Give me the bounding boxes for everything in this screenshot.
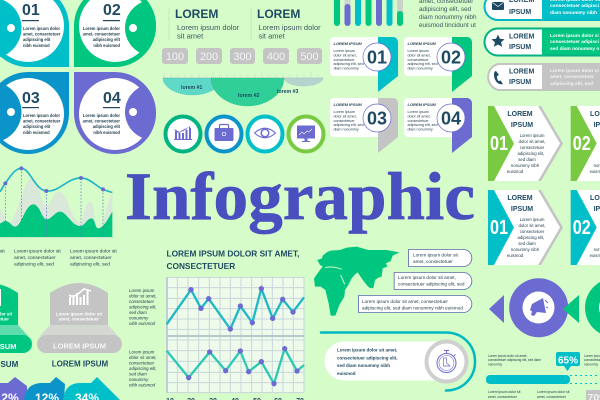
panel: chevron teal 01: consectetuer: [520, 229, 545, 234]
panel: ribbon card 03: diam nonummy: [334, 128, 359, 132]
chart heading: CONSECTETUER: [166, 261, 235, 271]
text block: two lorem columns: sit amet: [177, 32, 204, 40]
callout: map label three: [358, 295, 472, 312]
panel: quarter badge 04: amet, consectetuer: [83, 118, 120, 124]
panel: ribbon card 01: adipiscing elit, sed: [334, 62, 364, 66]
percentage arrow: blue: [24, 377, 65, 400]
panel: ribbon card 04: Lorem ipsum: [408, 110, 429, 114]
panel: ribbon card 04: diam nonummy: [408, 128, 433, 132]
text block: italic note one: nibh euismod: [129, 321, 156, 326]
panel: ribbon card 02: diam nonummy: [408, 66, 433, 70]
text block: chart captions: adipiscing elit, sed: [70, 262, 110, 268]
callout: map label two: consectetuer adipiscing elit, sed: [398, 282, 465, 286]
panel: ribbon card 02: [404, 37, 472, 92]
panel: star pill: [484, 28, 600, 56]
callout: map label two: [394, 272, 472, 289]
title: Infographic: [125, 158, 475, 234]
text block: italic note one: consectetuer: [129, 299, 155, 304]
semicircle scale chart: [163, 72, 323, 106]
value tags 100 to 500: [162, 48, 322, 64]
arrow: left triangle: [489, 295, 504, 323]
text block: progress notes: nonummy: [584, 362, 598, 366]
text block: top paragraph: adipiscing elit, sed: [419, 6, 472, 13]
panel: gray bell: Lorem ipsum dolor sit: [56, 312, 103, 316]
text block: italic note one: adipiscing elit,: [129, 304, 157, 310]
text block: two lorem columns: [168, 7, 321, 40]
text block: chart captions: amet, consectetuer: [70, 255, 112, 261]
panel: quarter badge 01: 01: [22, 2, 40, 19]
text block: chart captions: Lorem ipsum dolor sit: [70, 248, 117, 254]
panel: chevron teal 02: [571, 190, 600, 265]
callout: map label two: Lorem ipsum dolor sit amet,: [398, 275, 456, 280]
panel: chevron green 02: [571, 106, 600, 181]
text block: italic note one: Lorem ipsum: [129, 288, 155, 293]
panel: ribbon card 02: Lorem ipsum: [408, 49, 429, 53]
panel: gray bell: [37, 283, 122, 368]
panel: chevron teal 01: nonummy nibh: [511, 247, 540, 252]
panel: chevron green 01: IPSUM: [511, 122, 533, 129]
panel: ribbon card 04: dolor sit amet,: [408, 114, 431, 118]
panel: ribbon card 01: 01: [367, 48, 387, 68]
semicircle scale chart: lorem #2: [238, 93, 259, 99]
panel: ribbon card 01: consectetuer: [334, 58, 355, 62]
text block: chart captions: amet, consectetuer: [14, 255, 56, 261]
panel: ribbon card 01: dolor sit amet,: [334, 54, 357, 58]
panel: chevron green 01: euismod: [507, 169, 524, 174]
panel: gray bell: LOREM IPSUM: [52, 360, 109, 368]
value tags 100 to 500: 400: [267, 51, 285, 63]
text block: italic note two: consectetuer: [129, 360, 155, 366]
panel: quarter badge 04: nibh euismod: [93, 130, 120, 135]
icon: briefcase circle: [206, 116, 242, 152]
text block: top paragraph: diam nonummy nibh: [419, 14, 477, 21]
panel: phone pill: IPSUM: [509, 79, 531, 86]
panel: quarter badge 01: Lorem ipsum dolor: [23, 26, 60, 31]
progress bar 65%: 65%: [558, 356, 578, 366]
panel: phone pill: adipiscing elit, sed: [550, 81, 593, 87]
panel: ribbon card 03: LOREM IPSUM: [334, 102, 362, 107]
panel: star pill: LOREM: [509, 34, 534, 40]
panel: ribbon card 03: 03: [367, 108, 387, 128]
callout: map label three: adipiscing elit, sed diam nonummy nibh euismod: [362, 306, 463, 310]
panel: ribbon card 04: consectetuer: [408, 119, 429, 123]
panel: ribbon card 03: [330, 98, 398, 153]
panel: ribbon card 01: diam nonummy: [334, 66, 359, 70]
panel: phone pill: Lorem ipsum dolor si: [550, 68, 599, 74]
panel: phone pill: amet, consectetuer: [550, 74, 594, 80]
panel: quarter badge 03: Lorem ipsum dolor: [23, 113, 60, 118]
chart heading: LOREM IPSUM DOLOR SIT AMET,: [166, 248, 299, 258]
panel: quarter badge 04: [74, 72, 156, 154]
icon: megaphone circle: [509, 278, 568, 337]
text block: two lorem columns: LOREM: [257, 7, 300, 21]
text block: progress notes: nonummy: [488, 362, 502, 366]
panel: chevron teal 01: dolor sit amet,: [518, 223, 546, 228]
text block: top paragraph: euismod tincidunt ut: [419, 22, 476, 29]
panel: chevron teal 01: Lorem ipsum: [520, 217, 545, 222]
text block: italic note two: Lorem ipsum: [129, 350, 155, 354]
panel: quarter badge 02: [74, 0, 156, 67]
panel: stopwatch callout: sed diam nonummy nibh: [337, 363, 390, 368]
icon: eye circle: [248, 116, 282, 152]
panel: stopwatch callout: Lorem ipsum dolor sit amet,: [337, 348, 397, 353]
panel: gray bell: amet, consectetuer: [59, 316, 99, 322]
panel: phone pill: LOREM: [509, 68, 534, 76]
panel: ribbon card 03: consectetuer: [334, 119, 355, 123]
panel: chevron teal 01: LOREM: [507, 195, 533, 202]
value tags 100 to 500: 100: [166, 51, 184, 63]
text block: italic note one: dolor sit amet,: [129, 294, 157, 298]
panel: chevron green 01: LOREM: [507, 111, 533, 118]
percentage arrow: purple: [0, 377, 27, 400]
panel: gray bell: LOREM IPSUM: [53, 342, 106, 350]
line chart: [167, 277, 304, 393]
panel: chevron green 02: 02: [573, 133, 591, 155]
panel: ribbon card 02: adipiscing elit, sed: [408, 62, 438, 66]
panel: quarter badge 03: 03: [22, 90, 40, 107]
panel: quarter badge 01: amet, consectetuer: [23, 32, 61, 36]
value tags 100 to 500: 300: [233, 51, 252, 63]
panel: ribbon card 01: Lorem ipsum: [334, 49, 355, 53]
text block: italic note two: nonummy: [129, 377, 149, 382]
panel: star pill: Lorem ipsum dolor si: [550, 33, 599, 39]
text block: italic note one: sed diam: [129, 310, 147, 315]
value tags 100 to 500: 500: [300, 51, 319, 63]
callout: map label one: [408, 249, 472, 266]
text block: two lorem columns: Lorem ipsum dolor: [258, 23, 321, 32]
text block: chart captions: adipiscing elit, sed: [14, 262, 54, 268]
text block: chart captions: [0, 248, 117, 268]
area and line chart: [0, 166, 116, 237]
text block: progress notes: amet, consectetuer: [537, 395, 567, 399]
text block: progress notes: amet, consectetuer: [488, 395, 518, 399]
value tags 100 to 500: 200: [200, 51, 218, 63]
panel: mail pill: consectetuer adipisci: [550, 3, 599, 9]
panel: chevron teal 01: 01: [490, 217, 508, 239]
text block: italic note two: dolor sit amet,: [129, 355, 157, 360]
text block: italic note two: adipiscing elit,: [129, 366, 157, 371]
panel: quarter badge 03: amet, consectetuer: [23, 118, 61, 124]
text block: progress notes: [488, 354, 600, 399]
chart axis labels: [166, 398, 304, 400]
panel: quarter badge 02: adipiscing elit: [93, 37, 121, 42]
panel: chevron teal 01: sed diam: [518, 241, 536, 246]
panel: ribbon card 01: LOREM IPSUM: [334, 41, 362, 46]
panel: quarter badge 02: amet, consectetuer: [83, 32, 120, 36]
panel: ribbon card 02: LOREM IPSUM: [408, 41, 436, 46]
panel: ribbon card 04: adipiscing elit, sed: [408, 123, 438, 127]
panel: quarter badge 02: 02: [103, 2, 121, 19]
text block: italic note one: nonummy: [129, 316, 149, 320]
text block: two lorem columns: LOREM: [175, 7, 218, 21]
panel: chevron green 01: [488, 106, 563, 181]
panel: ribbon card 03: adipiscing elit, sed: [334, 123, 364, 127]
panel: ribbon card 02: 02: [441, 48, 461, 68]
panel: quarter badge 04: 04: [103, 90, 121, 107]
panel: ribbon card 01: [330, 37, 398, 92]
panel: star pill: sed diam nonummy n: [550, 46, 599, 52]
semicircle scale chart: lorem #3: [277, 89, 298, 95]
arrow: green triangle: [563, 295, 579, 323]
panel: ribbon card 04: LOREM IPSUM: [408, 102, 436, 107]
panel: quarter badge 04: adipiscing elit: [93, 124, 121, 129]
bar chart: top vertical pills: [337, 0, 400, 23]
icon: green circle: [585, 278, 600, 337]
panel: quarter badge 01: nibh euismod: [23, 43, 50, 48]
panel: ribbon card 02: consectetuer: [408, 58, 429, 62]
panel: chevron teal 02: 02: [573, 217, 591, 239]
panel: quarter badge 04: Lorem ipsum dolor: [83, 113, 120, 118]
callout: map label one: Lorem ipsum dolor sit: [413, 252, 459, 258]
callout: map label one: amet, consectetuer: [413, 259, 453, 264]
panel: star pill: consectetuer adipisci: [550, 39, 599, 45]
panel: chevron teal 01: adipiscing elit,: [518, 235, 544, 240]
panel: chevron teal 01: IPSUM: [511, 206, 533, 213]
icon: bar chart circle: [166, 116, 200, 152]
panel: chevron green 01: dolor sit amet,: [518, 139, 546, 144]
panel: chevron green 01: sed diam: [518, 157, 536, 162]
text block: italic note two: nibh euismod: [129, 382, 156, 388]
panel: mail pill: IPSUM: [509, 9, 531, 16]
panel: quarter badge 02: Lorem ipsum dolor: [83, 26, 120, 31]
text block: italic note two: sed diam: [129, 372, 147, 376]
text block: chart captions: Lorem ipsum dolor sit: [14, 248, 61, 254]
icon: monitor circle: [288, 116, 324, 152]
text block: progress notes: consectetuer adipiscing elit, sed diam: [488, 358, 541, 362]
panel: mail pill: [484, 0, 600, 20]
panel: chevron green 01: 01: [490, 133, 508, 155]
panel: ribbon card 03: dolor sit amet,: [334, 114, 357, 118]
panel: mail pill: diam nonummy nibh: [550, 10, 597, 16]
text block: progress notes: Lorem ipsum dolor sit: [537, 390, 569, 394]
panel: quarter badge 01: [0, 0, 69, 67]
panel: ribbon card 04: [404, 98, 472, 153]
panel: chevron green 01: Lorem ipsum: [520, 133, 545, 138]
callout: map label three: Lorem ipsum dolor sit amet, consectetuer: [362, 299, 448, 304]
percentage arrow: teal: [63, 377, 120, 400]
text block: two lorem columns: sit amet: [258, 32, 286, 40]
panel: quarter badge 03: adipiscing elit: [23, 124, 51, 129]
panel: stopwatch callout: [321, 332, 475, 390]
panel: ribbon card 04: 04: [441, 108, 461, 128]
panel: star pill: IPSUM: [509, 44, 531, 51]
progress bar 65%: [486, 352, 600, 384]
panel: stopwatch callout: consectetuer adipiscing elit,: [337, 355, 398, 360]
text block: progress notes: Lorem ipsum dolor sit amet,: [488, 354, 527, 358]
panel: chevron teal 01: [488, 190, 563, 265]
panel: chevron green 01: nonummy nibh: [511, 163, 540, 168]
semicircle scale chart: lorem #1: [181, 85, 202, 91]
world map: [314, 247, 399, 316]
panel: chevron green 01: consectetuer: [520, 145, 545, 150]
panel: quarter badge 02: nibh euismod: [93, 43, 120, 48]
panel: stopwatch callout: euismod: [337, 371, 356, 376]
panel: phone pill: [488, 64, 600, 90]
text block: progress notes: Lorem ipsum dolor sit: [488, 390, 520, 394]
panel: ribbon card 03: Lorem ipsum: [334, 110, 355, 114]
panel: quarter badge 03: nibh euismod: [23, 130, 50, 135]
text block: two lorem columns: Lorem ipsum dolor: [177, 23, 240, 32]
panel: chevron teal 01: euismod: [507, 253, 524, 258]
panel: ribbon card 02: dolor sit amet,: [408, 54, 431, 58]
panel: green bell: [0, 283, 32, 369]
panel: quarter badge 03: [0, 72, 69, 154]
panel: chevron green 01: adipiscing elit,: [518, 151, 544, 156]
panel: quarter badge 01: adipiscing elit: [23, 37, 51, 42]
